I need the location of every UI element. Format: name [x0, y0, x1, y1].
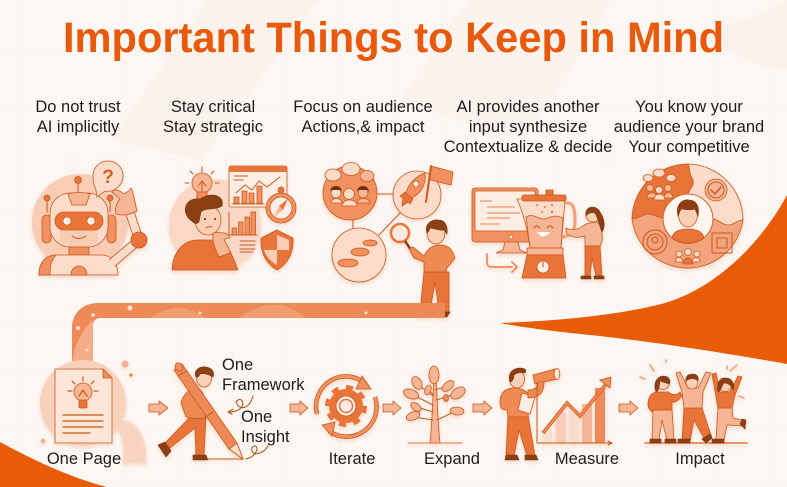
compass	[266, 187, 296, 223]
woman	[566, 207, 604, 279]
bar chart	[229, 212, 257, 252]
icon: thinking man with charts	[169, 166, 296, 271]
icon: audience, action and impact circles	[323, 162, 455, 317]
robot visor	[55, 212, 103, 230]
caption: you know your audience: audience your brand	[614, 118, 764, 136]
icon: iterate gear with cycle arrows	[316, 376, 377, 437]
caption: do not trust: AI implicitly	[37, 118, 120, 136]
caption: do not trust: Do not trust	[35, 98, 121, 116]
decorative orange wave right	[500, 195, 787, 364]
label: iterate: Iterate	[329, 450, 375, 468]
caption: you know your audience: Your competitive	[628, 138, 750, 156]
arrow	[619, 401, 638, 415]
icon: man with telescope and clipboard	[500, 368, 560, 460]
icon: audience ring diagram	[632, 164, 743, 268]
label: one framework: Framework	[222, 376, 305, 394]
flow ribbon path	[72, 303, 445, 366]
label: one framework: One	[222, 356, 253, 374]
caption: stay critical: Stay strategic	[163, 118, 263, 136]
icon: monitor, blender and woman	[472, 188, 604, 279]
icon: three celebrating people	[640, 360, 747, 443]
icon: person drawing with giant pen	[158, 361, 243, 460]
shield	[261, 230, 293, 270]
chart: rising bars and arrow	[537, 377, 612, 445]
ring segment: top left	[632, 164, 693, 219]
audience circle	[323, 162, 377, 220]
monitor	[472, 188, 538, 253]
robot arm	[112, 213, 139, 263]
ring segment: bottom	[632, 214, 743, 268]
label: measure: Measure	[555, 450, 619, 468]
person left	[648, 376, 682, 443]
label: one insight: Insight	[241, 428, 290, 446]
person with magnifier	[391, 220, 455, 317]
person middle	[676, 372, 712, 443]
label: impact: Impact	[675, 450, 725, 468]
decorative orange wave bottom left	[0, 442, 107, 487]
squiggle arrow	[228, 396, 253, 414]
caption: you know your audience: You know your	[635, 98, 743, 116]
squiggle flourish	[246, 446, 268, 459]
icon: robot asking a question: ?	[102, 167, 114, 188]
segment icons	[643, 169, 732, 264]
thinking man	[172, 195, 238, 270]
caption: focus on audience: Actions,& impact	[302, 118, 425, 136]
label: one page: One Page	[47, 450, 121, 468]
icon: growing tree	[402, 366, 467, 443]
question bubble	[93, 161, 123, 197]
caption: stay critical: Stay critical	[171, 98, 255, 116]
arrow	[149, 401, 168, 415]
label: expand: Expand	[424, 450, 480, 468]
blender	[517, 190, 575, 278]
arrow	[473, 401, 492, 415]
caption: AI provides input: AI provides another	[456, 98, 600, 116]
caption: AI provides input: input synthesize	[469, 118, 587, 136]
person right	[712, 373, 746, 443]
rocket circle	[393, 166, 453, 219]
dashboard window	[229, 166, 287, 207]
light bulb	[185, 167, 219, 201]
flow arrow	[487, 254, 517, 272]
caption: AI provides input: Contextualize & decide	[444, 138, 612, 156]
caption: focus on audience: Focus on audience	[293, 98, 433, 116]
coins circle	[332, 228, 386, 282]
label: one insight: One	[241, 408, 272, 426]
title: Important Things to Keep in Mind	[63, 14, 724, 62]
icon: one page document with bulb	[40, 360, 146, 465]
arrow	[383, 401, 401, 415]
ring segment: top right	[688, 164, 743, 225]
arrow	[290, 401, 308, 415]
person portrait	[672, 200, 704, 243]
icon: robot asking a question	[32, 161, 147, 275]
